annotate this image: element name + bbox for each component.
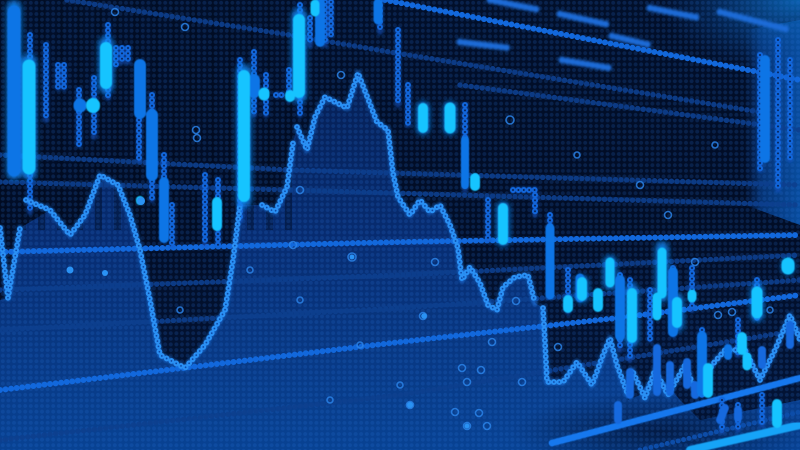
dark area lower right of the curve bbox=[510, 392, 800, 450]
bright panel band on the right edge bbox=[745, 20, 800, 225]
price curve glow bbox=[0, 73, 800, 398]
scattered ring dots bbox=[112, 8, 773, 430]
bright rising line, lower right bbox=[552, 378, 800, 443]
candlestick glow bbox=[14, 8, 788, 340]
price curve dots bbox=[0, 73, 800, 398]
price curve ring holes bbox=[0, 73, 800, 398]
bright glow, top right corner bbox=[660, 0, 800, 75]
lower right thick dotted peaks bbox=[618, 325, 790, 420]
low dim line bbox=[640, 412, 800, 450]
cyan corner line bbox=[690, 425, 800, 450]
blurred data dashes, top right bbox=[460, 0, 790, 68]
vertical column shading, top left bbox=[0, 0, 300, 230]
solid scattered dots bbox=[66, 197, 470, 428]
